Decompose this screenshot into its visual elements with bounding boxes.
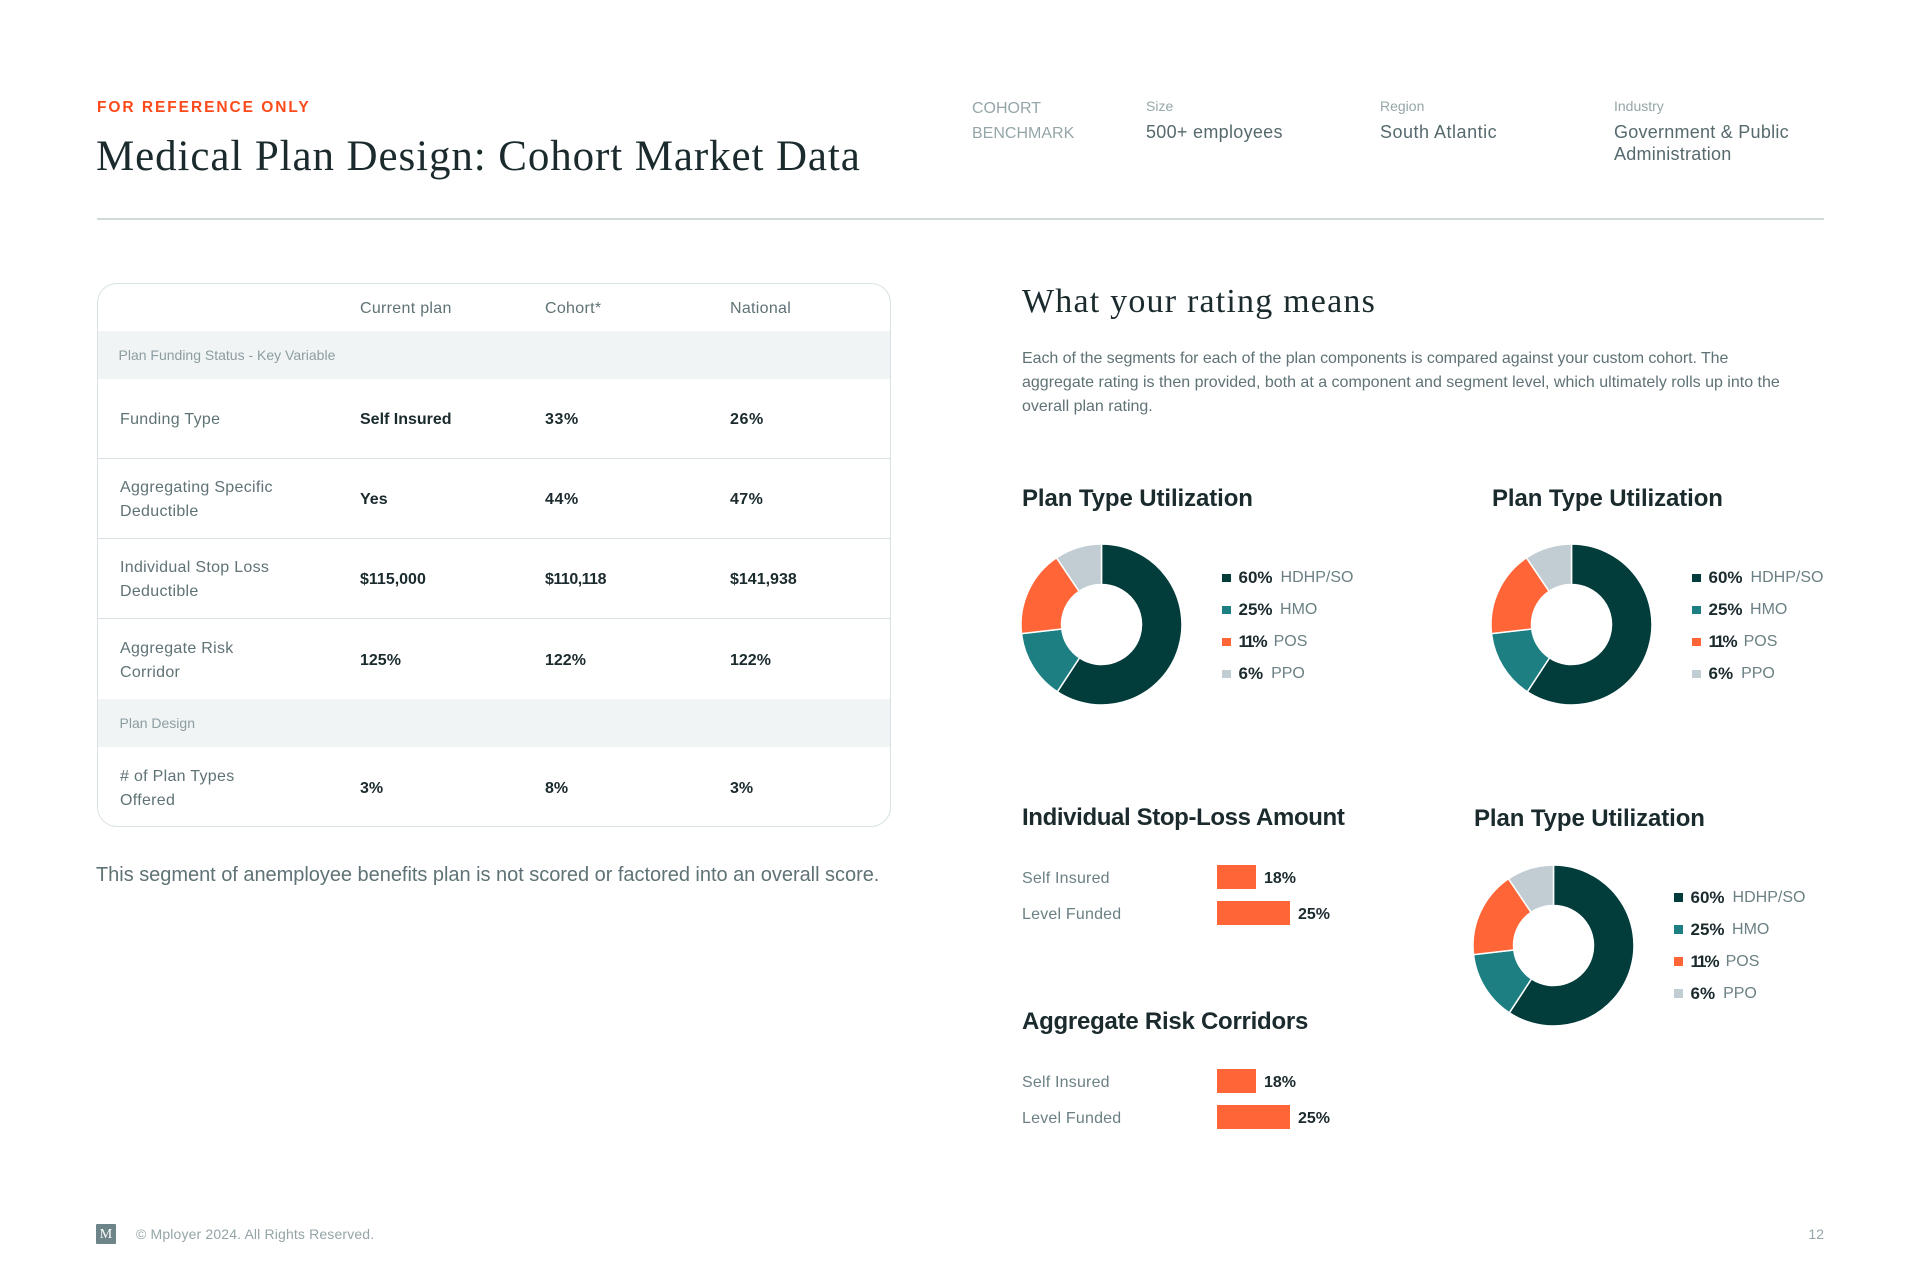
- icon: footer logo: [96, 1224, 116, 1244]
- row: funding type: Funding Type: [120, 411, 220, 428]
- legend item: POS: [1674, 952, 1759, 970]
- legend item: PPO: PPO: [1723, 984, 1757, 1002]
- row: individual stop loss deductible: $141,938: [730, 571, 797, 588]
- row: number of plan types offered: [120, 768, 753, 808]
- legend item: HMO: [1222, 600, 1317, 619]
- donut chart: [1474, 866, 1634, 1026]
- legend item: POS: 11%: [1238, 632, 1266, 651]
- description paragraph: aggregate rating is then provided, both at a component and segment level, which ultimately rolls up into the: [1022, 374, 1780, 391]
- panel: benchmark table: [97, 283, 891, 827]
- section band: plan design: Plan Design: [120, 715, 195, 731]
- legend item: HMO: 25%: [1238, 600, 1273, 619]
- row: aggregating specific deductible: [98, 459, 892, 539]
- legend item: PPO: [1674, 984, 1757, 1002]
- meta: industry: Industry: [1614, 98, 1664, 114]
- chart heading: Aggregate Risk Corridors: [1022, 1008, 1308, 1035]
- table header row: Cohort*: [545, 300, 601, 316]
- legend item: POS: POS: [1726, 952, 1759, 970]
- legend item: PPO: 6%: [1690, 984, 1715, 1002]
- row: aggregating specific deductible: 47%: [730, 491, 763, 508]
- cohort benchmark heading: BENCHMARK: [972, 124, 1074, 142]
- row: aggregate risk corridor: [120, 640, 771, 680]
- description paragraph: [1022, 350, 1780, 415]
- row: number of plan types offered: Offered: [120, 792, 175, 808]
- chart heading: Plan Type Utilization: [1022, 485, 1253, 512]
- row: aggregating specific deductible: Yes: [360, 491, 388, 508]
- meta: size: 500+ employees: [1146, 122, 1283, 142]
- footer copyright: © Mployer 2024. All Rights Reserved.: [136, 1226, 374, 1242]
- legend item: HDHP/SO: [1674, 888, 1805, 906]
- chart heading: Plan Type Utilization: [1474, 804, 1705, 832]
- legend item: HDHP/SO: [1222, 568, 1353, 587]
- row: individual stop loss deductible: $110,118: [545, 571, 606, 588]
- bar row: self insured: Self Insured: [1022, 870, 1110, 887]
- icon: footer logo: M: [100, 1227, 112, 1242]
- legend item: POS: 11%: [1690, 952, 1718, 970]
- legend item: HDHP/SO: 60%: [1238, 568, 1273, 587]
- legend item: POS: [1692, 632, 1777, 651]
- title: Medical Plan Design: Cohort Market Data: [96, 133, 861, 180]
- cohort benchmark heading: [972, 100, 1074, 142]
- panel: plan type utilization 1: [1022, 485, 1353, 704]
- legend item: HDHP/SO: 60%: [1690, 888, 1725, 906]
- row: aggregating specific deductible: Aggregating Specific: [120, 479, 273, 496]
- meta: region: [1380, 98, 1497, 142]
- legend item: HDHP/SO: HDHP/SO: [1281, 569, 1353, 586]
- description paragraph: Each of the segments for each of the plan components is compared against your custom cohort. The: [1022, 350, 1728, 367]
- row: funding type: Self Insured: [360, 411, 452, 428]
- row: individual stop loss deductible: Deductible: [120, 583, 199, 600]
- meta: industry: [1614, 98, 1789, 164]
- row: funding type: [98, 379, 892, 459]
- cohort benchmark heading: COHORT: [972, 100, 1041, 117]
- meta: size: Size: [1146, 98, 1173, 114]
- legend item: HMO: [1692, 600, 1787, 619]
- donut chart: [1022, 544, 1182, 704]
- legend item: POS: 11%: [1708, 632, 1736, 651]
- description paragraph: overall plan rating.: [1022, 398, 1153, 415]
- meta: industry: Administration: [1614, 144, 1732, 164]
- meta: industry: Government & Public: [1614, 122, 1789, 142]
- bar row: level funded: Level Funded: [1022, 1110, 1121, 1127]
- eyebrow label: FOR REFERENCE ONLY: [97, 98, 311, 116]
- row: individual stop loss deductible: $115,000: [360, 571, 426, 588]
- row: individual stop loss deductible: Individual Stop Loss: [120, 559, 269, 576]
- legend item: HMO: 25%: [1690, 920, 1725, 938]
- row: aggregate risk corridor: 125%: [360, 652, 401, 668]
- legend item: PPO: 6%: [1238, 664, 1263, 683]
- table header row: Current plan: [360, 300, 452, 316]
- legend item: HDHP/SO: HDHP/SO: [1751, 569, 1823, 586]
- chart heading: Plan Type Utilization: [1492, 485, 1723, 512]
- page number: 12: [1808, 1226, 1824, 1242]
- row: funding type: 26%: [730, 411, 764, 428]
- row: aggregate risk corridor: 122%: [730, 652, 771, 668]
- bar row: level funded: 25%: [1298, 1110, 1330, 1127]
- row: funding type: 33%: [545, 411, 579, 428]
- donut chart: [1492, 544, 1652, 704]
- legend item: PPO: [1222, 664, 1305, 683]
- row: aggregating specific deductible: 44%: [545, 491, 579, 508]
- row: number of plan types offered: 3%: [360, 780, 383, 796]
- legend item: PPO: 6%: [1708, 664, 1733, 683]
- table header row: [360, 300, 791, 316]
- legend item: HMO: 25%: [1708, 600, 1743, 619]
- legend item: HMO: [1674, 920, 1769, 938]
- table header row: National: [730, 300, 791, 316]
- row: aggregate risk corridor: 122%: [545, 652, 586, 668]
- meta: region: Region: [1380, 98, 1424, 114]
- legend item: HDHP/SO: HDHP/SO: [1733, 888, 1805, 906]
- chart heading: Individual Stop-Loss Amount: [1022, 804, 1344, 831]
- legend item: PPO: PPO: [1271, 665, 1305, 682]
- legend item: HDHP/SO: [1692, 568, 1823, 587]
- row: aggregate risk corridor: Corridor: [120, 664, 180, 680]
- row: individual stop loss deductible: [98, 539, 892, 619]
- legend item: PPO: [1692, 664, 1775, 683]
- bar row: level funded: [1022, 1105, 1330, 1129]
- legend item: HMO: HMO: [1732, 920, 1769, 938]
- section band: plan design: [98, 699, 892, 747]
- section band: plan funding status: Plan Funding Status - Key Variable: [118, 347, 335, 363]
- legend item: POS: POS: [1744, 633, 1777, 650]
- row: number of plan types offered: 8%: [545, 780, 568, 796]
- legend item: PPO: PPO: [1741, 665, 1775, 682]
- table footnote: This segment of anemployee benefits plan is not scored or factored into an overall score.: [96, 864, 879, 886]
- legend item: HDHP/SO: 60%: [1708, 568, 1743, 587]
- panel: aggregate risk corridors: [1022, 1008, 1330, 1129]
- legend item: POS: POS: [1274, 633, 1307, 650]
- bar row: level funded: [1022, 901, 1330, 925]
- bar row: self insured: [1022, 1069, 1296, 1093]
- legend item: HMO: HMO: [1280, 601, 1317, 618]
- legend item: HMO: HMO: [1750, 601, 1787, 618]
- row: number of plan types offered: 3%: [730, 780, 753, 796]
- bar row: level funded: Level Funded: [1022, 906, 1121, 923]
- legend item: POS: [1222, 632, 1307, 651]
- bar row: self insured: [1022, 865, 1296, 889]
- meta: size: [1146, 98, 1283, 142]
- panel: plan type utilization 3: [1474, 804, 1805, 1026]
- bar row: level funded: 25%: [1298, 906, 1330, 923]
- row: aggregate risk corridor: Aggregate Risk: [120, 640, 234, 656]
- bar row: self insured: 18%: [1264, 870, 1296, 887]
- section band: plan funding status: [98, 331, 892, 379]
- bar row: self insured: 18%: [1264, 1074, 1296, 1091]
- panel: individual stop-loss amount: [1022, 804, 1345, 925]
- row: number of plan types offered: # of Plan Types: [120, 768, 234, 784]
- row: aggregating specific deductible: Deductible: [120, 503, 199, 520]
- panel: plan type utilization 2: [1492, 485, 1823, 704]
- bar row: self insured: Self Insured: [1022, 1074, 1110, 1091]
- meta: region: South Atlantic: [1380, 122, 1497, 142]
- section heading: What your rating means: [1022, 283, 1376, 320]
